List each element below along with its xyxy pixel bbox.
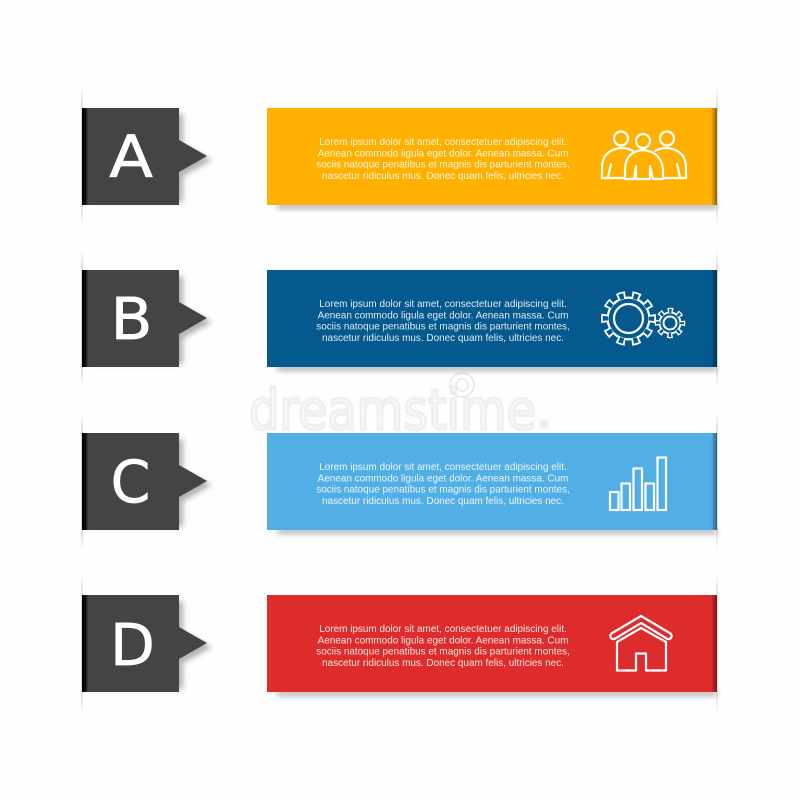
row D xyxy=(82,575,718,712)
text A xyxy=(316,137,570,182)
text C: Aenean commodo ligula eget dolor. Aenean massa. Cum xyxy=(318,473,568,484)
text C: Lorem ipsum dolor sit amet, consectetuer adipiscing elit. xyxy=(319,462,567,473)
text D xyxy=(316,624,570,669)
text A: Lorem ipsum dolor sit amet, consectetuer adipiscing elit. xyxy=(319,137,567,148)
text B: nascetur ridiculus mus. Donec quam felis, ultricies nec. xyxy=(322,333,564,344)
row A xyxy=(82,88,718,225)
letter tag D: D xyxy=(110,611,155,679)
text B: sociis natoque penatibus et magnis dis parturient montes, xyxy=(316,322,570,333)
text C xyxy=(316,462,570,507)
icon: gears xyxy=(604,294,683,343)
text A: nascetur ridiculus mus. Donec quam felis, ultricies nec. xyxy=(322,171,564,182)
band D xyxy=(267,575,718,712)
text B xyxy=(316,299,570,344)
text D: Lorem ipsum dolor sit amet, consectetuer adipiscing elit. xyxy=(319,624,567,635)
row C xyxy=(82,413,718,550)
watermark: dreamstime xyxy=(249,378,536,442)
icon: house xyxy=(610,616,672,670)
row B xyxy=(82,250,718,387)
letter tag D xyxy=(82,575,212,712)
band B xyxy=(267,250,718,387)
band C xyxy=(267,413,718,550)
letter tag B xyxy=(82,250,212,387)
text B: Lorem ipsum dolor sit amet, consectetuer adipiscing elit. xyxy=(319,299,567,310)
text C: sociis natoque penatibus et magnis dis parturient montes, xyxy=(316,485,570,496)
letter tag C xyxy=(82,413,212,550)
text C: nascetur ridiculus mus. Donec quam felis, ultricies nec. xyxy=(322,496,564,507)
letter tag A: A xyxy=(109,124,153,191)
band A xyxy=(267,88,718,225)
letter tag C: C xyxy=(111,448,150,516)
icon: people xyxy=(602,132,686,179)
icon: bar chart xyxy=(610,458,666,510)
text B: Aenean commodo ligula eget dolor. Aenean massa. Cum xyxy=(318,310,568,321)
text A: Aenean commodo ligula eget dolor. Aenean massa. Cum xyxy=(318,148,568,159)
text D: Aenean commodo ligula eget dolor. Aenean massa. Cum xyxy=(318,635,568,646)
letter tag B: B xyxy=(111,286,152,354)
text A: sociis natoque penatibus et magnis dis parturient montes, xyxy=(316,160,570,171)
text D: nascetur ridiculus mus. Donec quam felis, ultricies nec. xyxy=(322,658,564,669)
text D: sociis natoque penatibus et magnis dis parturient montes, xyxy=(316,647,570,658)
letter tag A xyxy=(82,88,212,225)
